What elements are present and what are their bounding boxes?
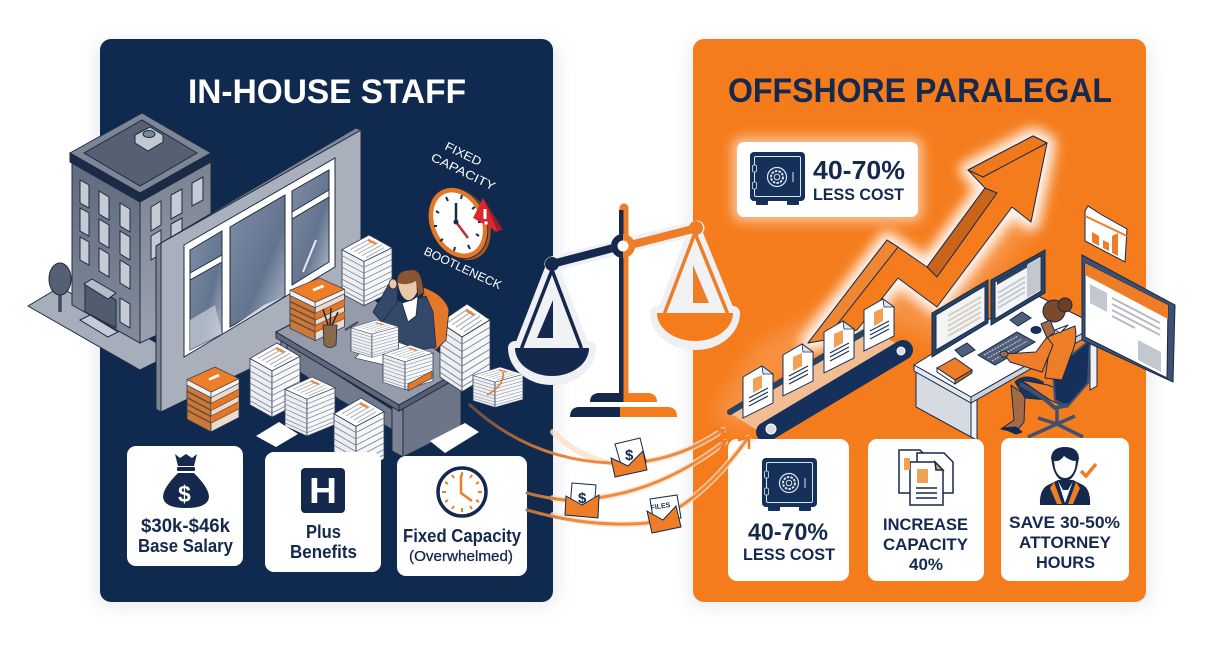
label: fixed capacity [429,139,498,193]
card: increase capacity [868,439,984,581]
heading: in-house staff: IN-HOUSE STAFF [188,73,466,111]
icon: clock [438,468,486,516]
icon: envelope with files note [647,495,681,533]
icon: envelope with dollar note 2 [565,483,599,518]
illustration: desk paper piles [351,320,433,391]
card: increase capacity: INCREASE [883,515,968,534]
arrows: flow from in-house to offshore [470,405,749,524]
card: plus benefits: Plus [306,522,341,542]
panel: in-house staff background [100,39,553,602]
card: fixed capacity [397,456,527,576]
label: bootleneck: BOOTLENECK [422,244,504,292]
icon: red warning triangle [473,198,503,232]
icon: envelope with dollar note 2: $ [578,490,587,507]
illustration: offshore paralegal at work [1000,298,1090,437]
callout: 40-70% less cost [732,137,923,222]
card: base salary [127,446,243,566]
card: increase capacity: CAPACITY [883,535,969,554]
icon: envelope with files note: FILES [650,502,671,512]
card: less cost [728,439,849,581]
card: plus benefits: Benefits [290,542,357,562]
icon: envelope with dollar note 1: $ [625,447,634,464]
icon: hospital H: H [309,470,337,511]
callout: 40-70% less cost: 40-70% [813,155,905,185]
panel: offshore paralegal background [693,39,1146,602]
card: attorney hours [1001,438,1129,581]
illustration: desk [276,288,461,457]
illustration: floating browser window [1082,255,1175,382]
arrow glow [728,136,1047,425]
icon: attorney with check [1040,447,1096,505]
card: base salary: Base Salary [138,536,233,556]
icon: envelope with dollar note 1 [611,438,647,477]
illustration: office wall with window [156,128,361,412]
illustration: overwhelmed employee [373,270,449,350]
illustration: keyboard and notebook [937,326,1041,384]
icon: floating chart folder [1085,206,1127,262]
callout: 40-70% less cost: LESS COST [813,185,905,204]
icon: document stack [899,450,953,505]
label: fixed capacity: FIXED [443,139,484,169]
card: less cost: LESS COST [743,545,836,564]
icon: money bag: $ [178,481,191,507]
illustration: growth arrow [808,136,1047,343]
card: plus benefits [265,452,381,572]
illustration: paper stacks and folders [187,235,523,474]
card: fixed capacity: (Overwhelmed) [409,548,513,565]
illustration: fixed capacity wall clock [417,178,502,270]
card: increase capacity: 40% [909,555,943,574]
illustration: pen holder [323,308,358,348]
card: fixed capacity: Fixed Capacity [403,526,521,546]
card: attorney hours: SAVE 30-50% [1009,513,1120,532]
heading: offshore paralegal: OFFSHORE PARALEGAL [728,72,1112,110]
illustration: office building [28,113,211,370]
label: fixed capacity: CAPACITY [429,150,498,193]
panel shadows [97,42,1150,606]
illustration: dual monitors [932,250,1045,357]
card: base salary: $30k-$46k [141,516,230,537]
illustration: offshore work desk [914,293,1097,440]
card: attorney hours: HOURS [1036,553,1095,572]
card: less cost: 40-70% [748,519,828,546]
illustration: balance scale [515,208,733,417]
card: attorney hours: ATTORNEY [1019,533,1112,552]
illustration: document conveyor belt [728,299,905,434]
